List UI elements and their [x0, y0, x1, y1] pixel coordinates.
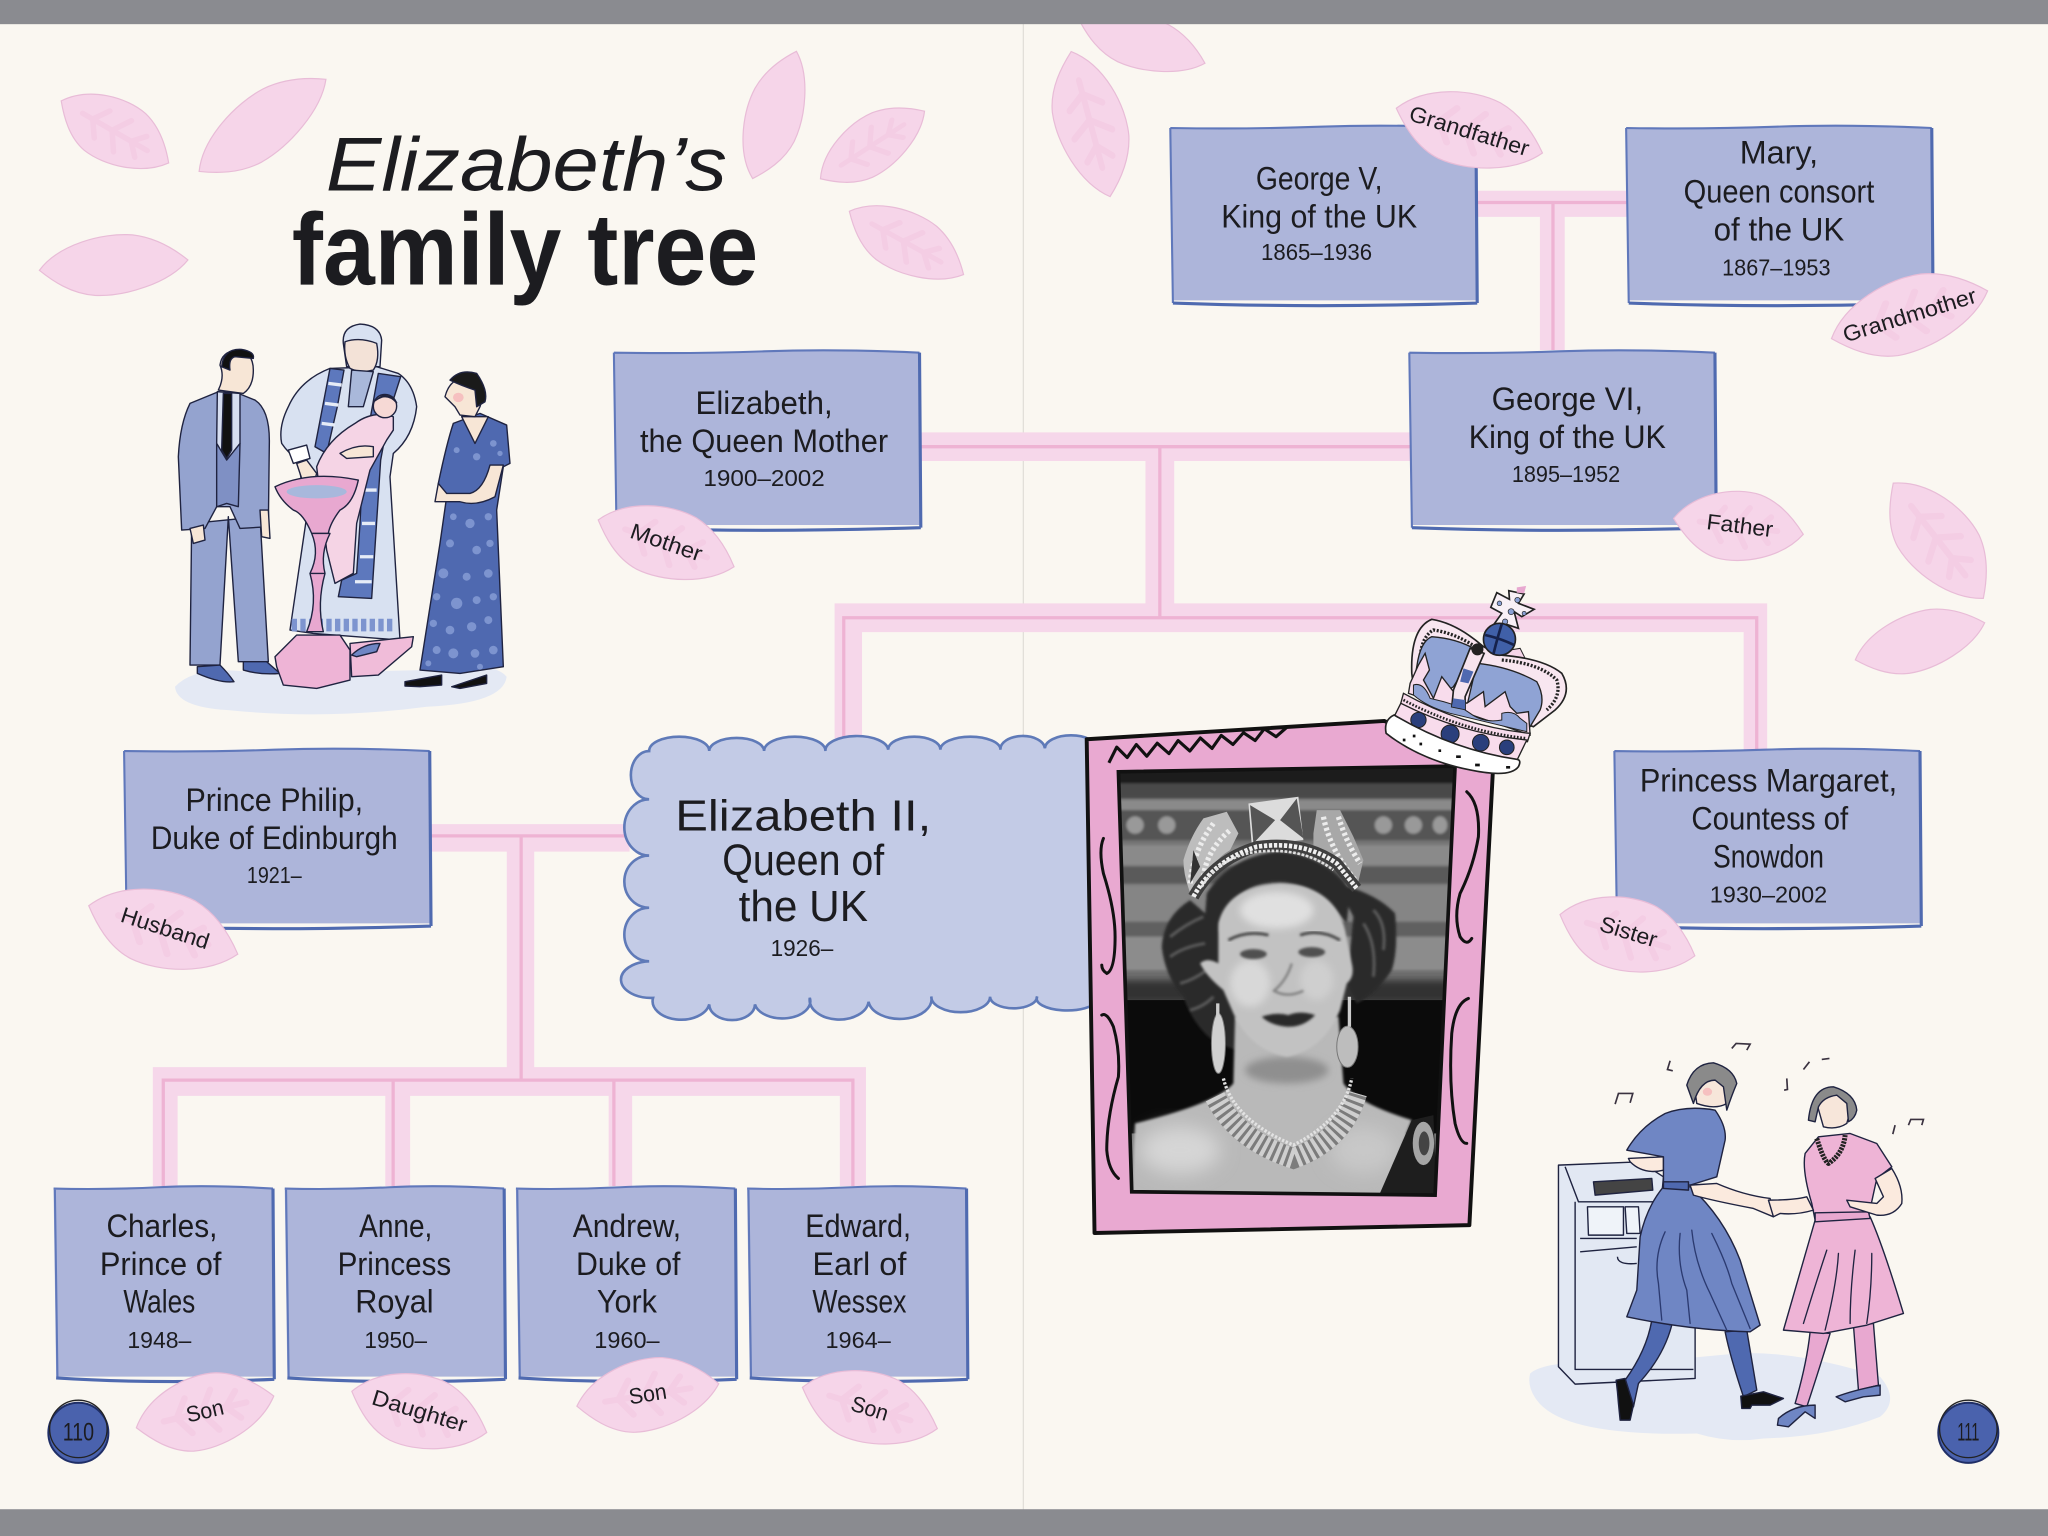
box: Queen Mother [614, 350, 921, 530]
box: Andrew: York [597, 1283, 658, 1320]
box: Anne [285, 1186, 505, 1382]
box: Princess Margaret: Princess Margaret, [1640, 762, 1897, 799]
central cloud: Elizabeth II: Elizabeth II, [675, 793, 931, 841]
page number 110: 110 [63, 1420, 94, 1447]
leaf label: Mother: Mother [627, 518, 706, 567]
central cloud: Elizabeth II: 1926– [771, 935, 834, 961]
title: family tree [292, 193, 758, 307]
leaf label: Grandmother: Grandmother [1840, 283, 1980, 347]
leaf label: Mother [587, 487, 746, 600]
box: Charles [54, 1186, 274, 1382]
box: Mary [1626, 126, 1933, 306]
box: Prince Philip: Prince Philip, [185, 781, 363, 818]
leaf label: Son (Andrew): Son [627, 1379, 668, 1409]
face [1200, 883, 1353, 1057]
leaf label: Son (Charles) [128, 1360, 282, 1463]
box: Princess Margaret: 1930–2002 [1710, 882, 1827, 908]
leaf label: Sister [1549, 879, 1706, 991]
leaf label: Son (Charles): Son [184, 1395, 226, 1427]
box: Charles: Prince of [100, 1245, 222, 1282]
font [275, 476, 413, 688]
box: Edward: 1964– [825, 1327, 892, 1353]
box: George V: King of the UK [1221, 197, 1417, 234]
decorative leaves [37, 0, 2012, 687]
box: Queen Mother: the Queen Mother [640, 422, 888, 459]
tiara [1183, 812, 1238, 897]
leaf label: Grandfather: Grandfather [1406, 101, 1533, 161]
page number 110 [48, 1400, 108, 1463]
box: George VI: 1895–1952 [1512, 461, 1620, 487]
leaf label: Son (Andrew) [571, 1348, 724, 1441]
leaf label: Sister: Sister [1597, 911, 1661, 952]
photograph of Elizabeth II [1110, 763, 1463, 1200]
leaf label: Father [1669, 483, 1808, 569]
central cloud: Elizabeth II: Queen of [722, 837, 885, 885]
box: George VI [1409, 350, 1716, 530]
box: Mary: 1867–1953 [1722, 255, 1831, 281]
hair [1162, 852, 1396, 1050]
jukebox [1558, 1162, 1695, 1384]
earrings [1211, 1013, 1225, 1073]
leaf label: Daughter [341, 1356, 498, 1467]
box: Andrew: Duke of [576, 1245, 681, 1282]
box: Prince Philip: 1921– [247, 862, 302, 888]
illustration: dancing sisters [1529, 1043, 1923, 1440]
box: Charles: 1948– [127, 1327, 192, 1353]
box: Andrew: Andrew, [573, 1207, 681, 1244]
photo frame [1087, 721, 1493, 1233]
leaf label: Grandfather [1386, 73, 1553, 188]
box: Anne: 1950– [364, 1327, 428, 1353]
box: Andrew [516, 1186, 737, 1382]
figure: dancer in pink [1768, 1087, 1903, 1427]
central cloud: Elizabeth II [621, 735, 1097, 1020]
family tree connectors [153, 191, 1767, 1186]
box: Queen Mother: Elizabeth, [696, 384, 833, 421]
box: Prince Philip: Duke of Edinburgh [151, 819, 398, 856]
box: Anne: Anne, [359, 1207, 432, 1244]
icon: crown [1386, 586, 1566, 773]
music notes [1615, 1043, 1923, 1134]
leaf label: Son (Edward) [792, 1353, 948, 1462]
box: Charles: Wales [123, 1283, 195, 1320]
leaf label: Daughter: Daughter [369, 1385, 471, 1437]
box: Charles: Charles, [106, 1207, 217, 1244]
central cloud: Elizabeth II: the UK [739, 883, 868, 931]
figure: woman in blue dress [405, 372, 510, 688]
box: George VI: George VI, [1492, 380, 1643, 417]
box: Edward [747, 1186, 968, 1382]
shoulders [1132, 1017, 1412, 1197]
box: George V: 1865–1936 [1261, 239, 1372, 265]
page number 111 [1938, 1400, 1998, 1463]
box: Edward: Edward, [805, 1207, 911, 1244]
illustration: christening [175, 324, 510, 714]
box: Anne: Princess [338, 1245, 451, 1282]
box: George VI: King of the UK [1469, 418, 1666, 455]
box: Princess Margaret: Countess of [1691, 799, 1849, 836]
box: Princess Margaret [1614, 749, 1921, 929]
box: Mary: Mary, [1740, 133, 1818, 170]
box: Edward: Wessex [812, 1283, 906, 1320]
box: Mary: Queen consort [1684, 172, 1874, 209]
leaf label: Son (Edward): Son [848, 1391, 892, 1426]
page number 111: 111 [1957, 1420, 1979, 1447]
leaf label: Grandmother [1821, 256, 1998, 373]
box: Anne: Royal [355, 1283, 434, 1320]
box: George V [1170, 126, 1477, 306]
dress [1378, 1115, 1437, 1197]
leaf label: Father: Father [1705, 509, 1775, 542]
box: Princess Margaret: Snowdon [1713, 837, 1824, 874]
leaf label: Husband [77, 869, 250, 990]
box: George V: George V, [1256, 159, 1383, 196]
figure: priest holding baby [281, 324, 417, 640]
figure: man in suit [178, 349, 280, 682]
title: Elizabeth’s [326, 123, 727, 208]
leaf label: Husband: Husband [118, 902, 213, 954]
figure: dancer in blue [1616, 1063, 1783, 1420]
box: Edward: Earl of [812, 1245, 907, 1282]
box: Queen Mother: 1900–2002 [703, 465, 825, 491]
box: Andrew: 1960– [594, 1327, 661, 1353]
box: Mary: of the UK [1714, 210, 1844, 247]
box: Prince Philip [124, 749, 431, 929]
necklace [1215, 1093, 1357, 1158]
title [292, 123, 758, 307]
